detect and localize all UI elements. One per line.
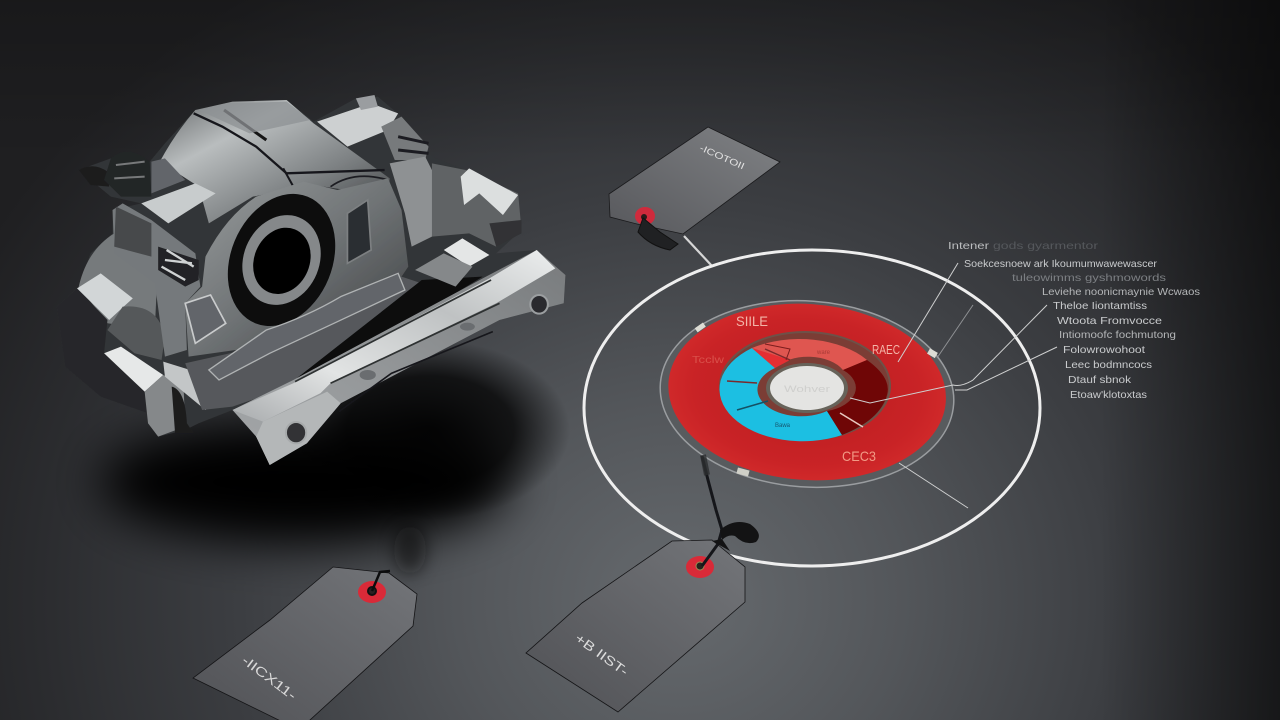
disc label: cyan segment: Bawa	[775, 423, 791, 429]
disc label: stile: SIILE	[736, 313, 768, 329]
caliper front bearing face	[185, 178, 408, 357]
pie chart disc	[654, 291, 960, 497]
caliper silhouette	[57, 97, 565, 465]
caliper rear housing	[79, 233, 158, 330]
disc label: cecs: CEC3	[842, 448, 876, 464]
caliper bracket bar	[233, 250, 565, 465]
caliper shadow	[100, 340, 570, 574]
tag: bottom left: -IICX11-	[239, 652, 299, 703]
text list: Theloe Iiontamtiss	[1053, 300, 1147, 312]
tag: top	[609, 127, 780, 250]
caliper lower left body	[57, 288, 151, 413]
leader lines	[765, 263, 1057, 508]
callout line: top tag to ring	[684, 236, 712, 266]
segment: bright red wedge	[752, 348, 790, 368]
text list: Dtauf sbnok	[1068, 374, 1132, 386]
tag: bottom centre	[526, 540, 745, 712]
text list: Soekcesnoew ark Ikoumumwawewascer	[964, 258, 1158, 270]
text list: gods gyarmentor	[993, 240, 1099, 252]
disc inner rim	[720, 332, 890, 440]
caliper left mounting boss	[113, 183, 226, 357]
disc label: left: Tcclw	[692, 355, 725, 366]
caliper lower web	[209, 273, 405, 380]
segment dividers	[727, 349, 790, 410]
caliper upper hump	[160, 100, 390, 223]
text list: Folowrowohoot	[1063, 344, 1145, 356]
text list: Leviehe noonicmaynie Wcwaos	[1042, 286, 1200, 298]
segment: cyan	[720, 348, 842, 441]
icon: brake caliper	[57, 95, 565, 465]
disc label: light red segment: ware	[816, 350, 831, 356]
string: bottom tag cord	[702, 455, 759, 566]
caliper bearing ring	[209, 178, 354, 342]
tag: bottom left	[193, 567, 417, 720]
text list: Wtoota Fromvocce	[1057, 315, 1162, 327]
disc hub	[766, 363, 848, 413]
large outline circle	[584, 250, 1040, 566]
caliper lower web base	[185, 277, 422, 410]
segment: dark red	[827, 360, 888, 435]
text list: Leec bodmncocs	[1065, 359, 1152, 371]
caliper right side column	[317, 95, 522, 287]
segment: light red	[752, 339, 867, 370]
tag: top: -ICOTOII	[698, 143, 746, 171]
tag: bottom centre: +B IIST-	[572, 630, 631, 679]
disc rim markers	[695, 322, 938, 476]
text list: Intener	[948, 240, 990, 252]
disc label: rale: RAEC	[872, 342, 900, 357]
disc hub: Wohver	[784, 384, 830, 394]
text list: Etoaw'klotoxtas	[1070, 389, 1147, 401]
disc outer ring	[654, 291, 960, 497]
text list: Intiomoofc fochmutong	[1059, 329, 1176, 341]
caliper bleeder screw	[79, 152, 185, 197]
text list	[948, 240, 1200, 401]
caliper inner cavity	[297, 277, 483, 383]
text list: tuleowimms gyshmowords	[1012, 272, 1166, 284]
caliper left block	[77, 273, 226, 437]
